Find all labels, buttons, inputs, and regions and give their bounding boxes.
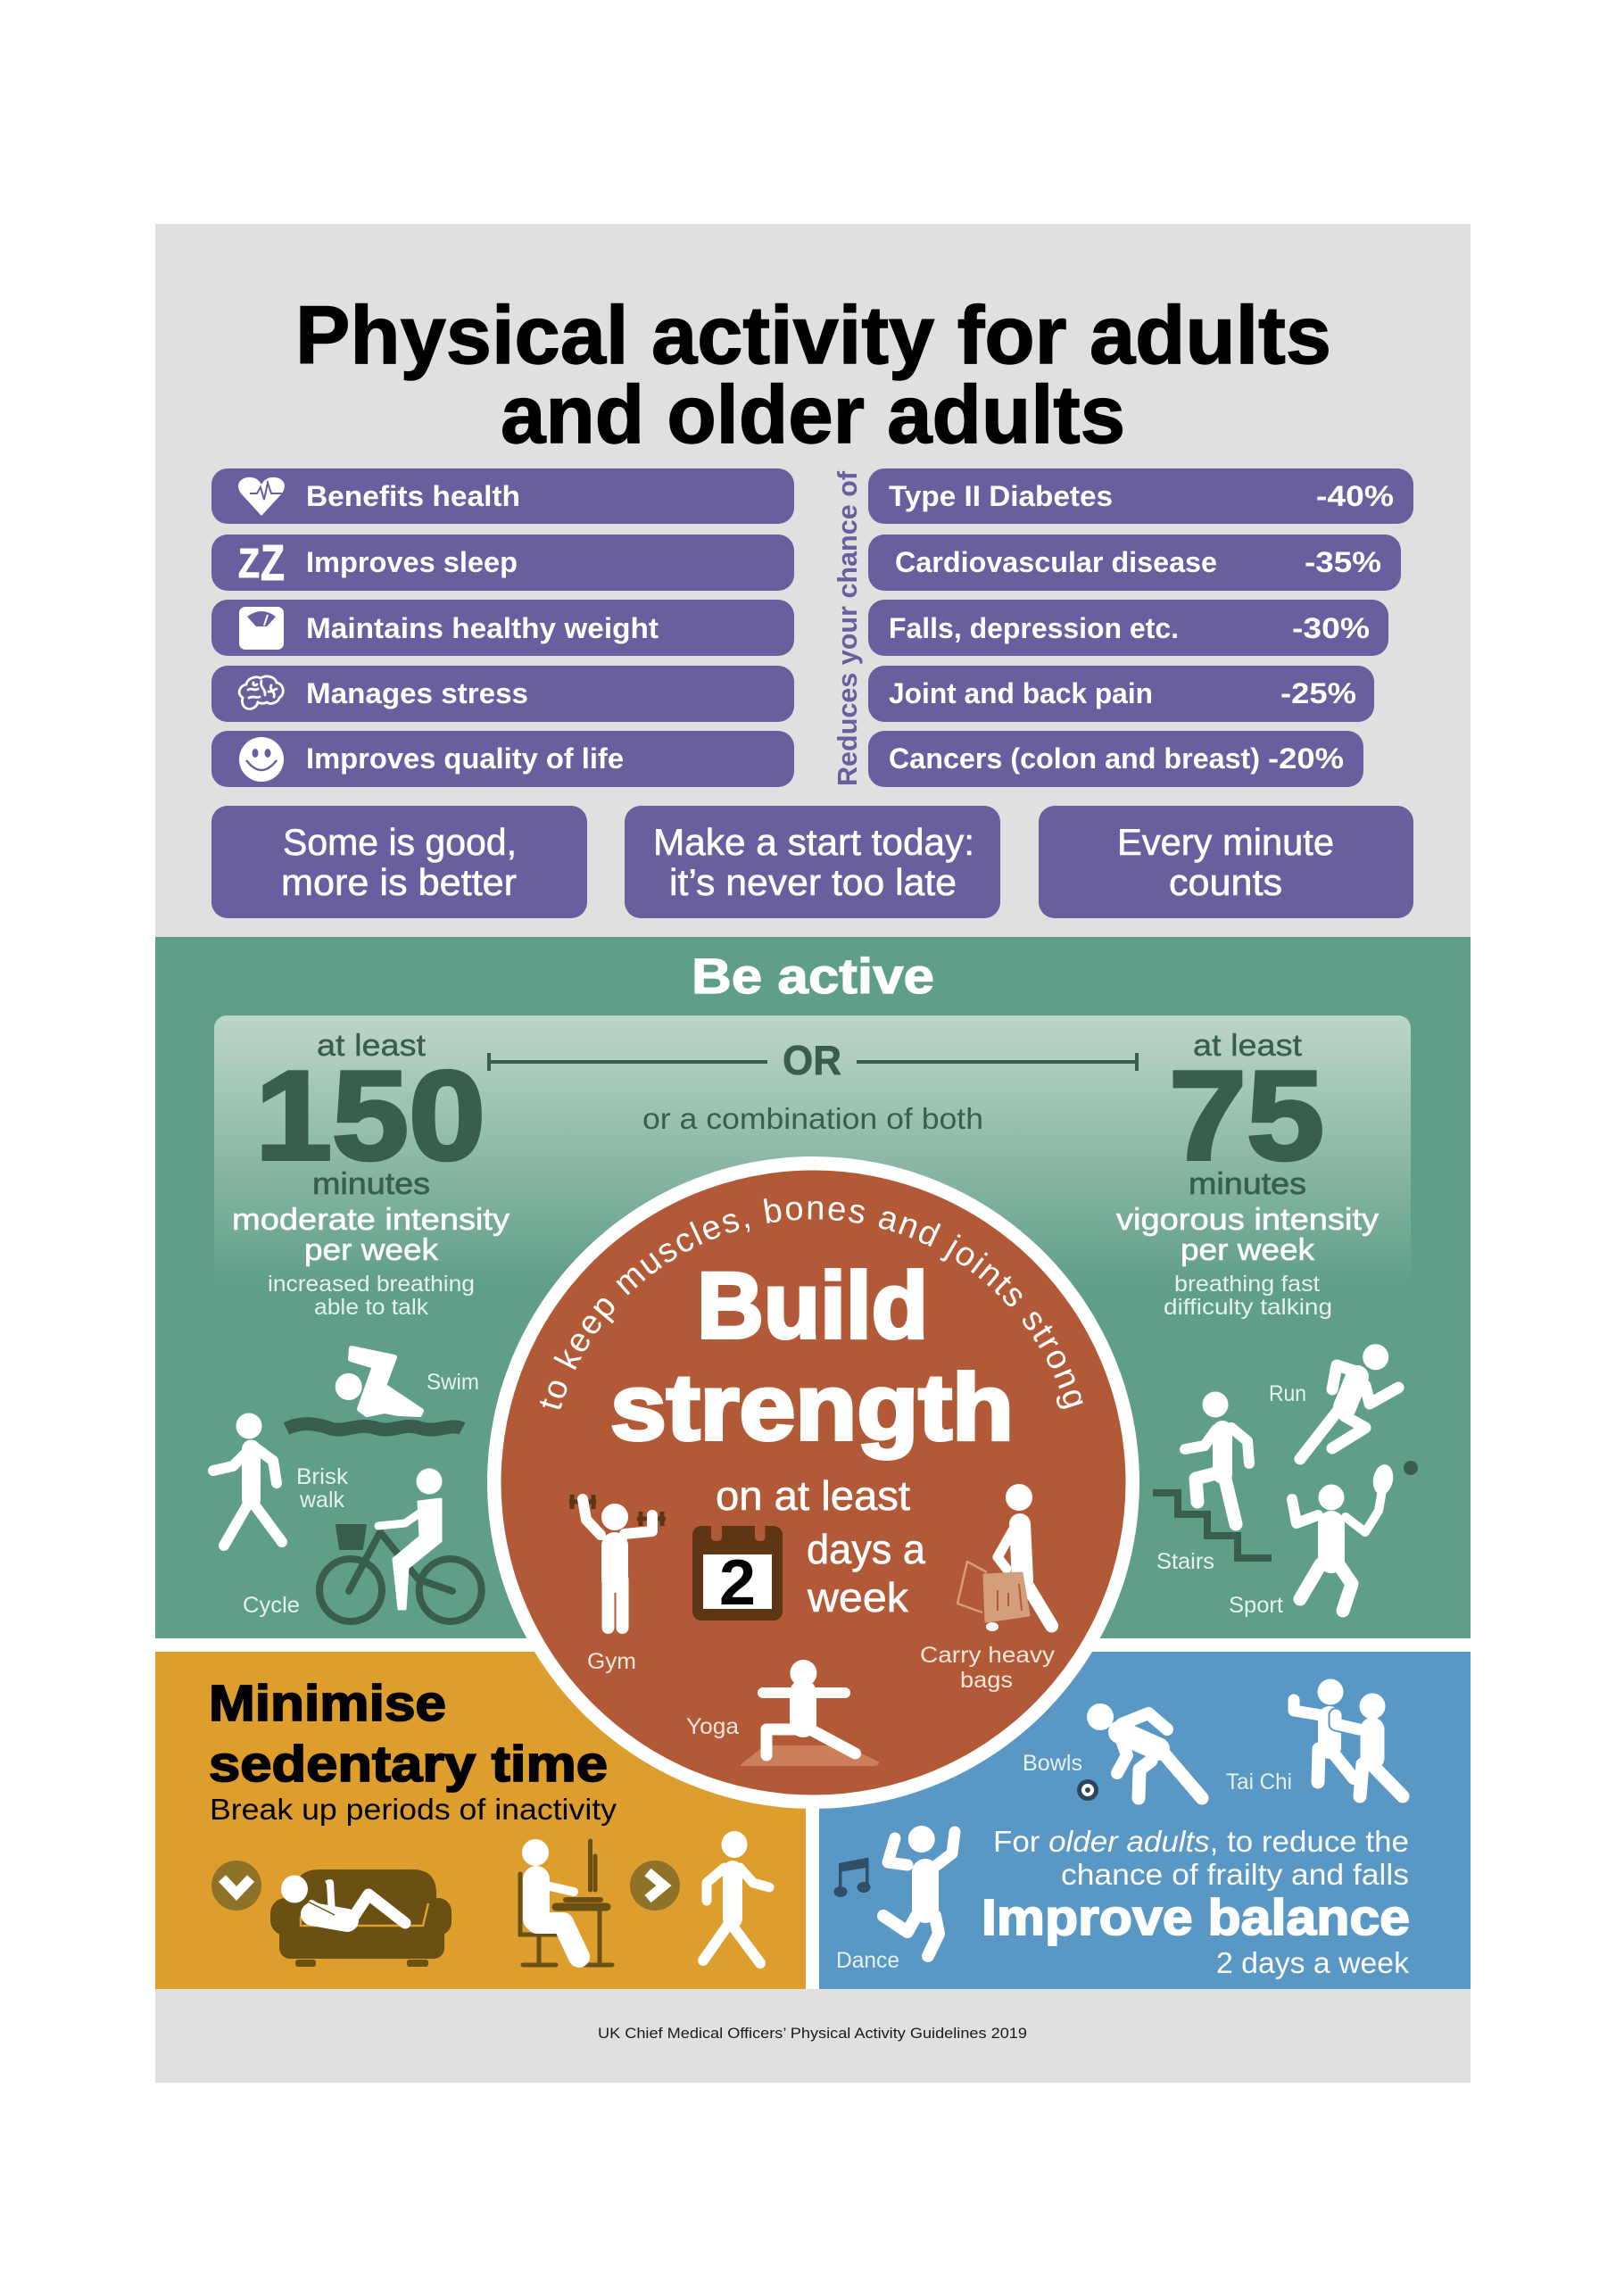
message: some is good xyxy=(211,806,587,918)
column: moderate: per week xyxy=(304,1233,439,1267)
heading: build strength: strength xyxy=(610,1355,1014,1460)
text: minimise sedentary time: Minimise xyxy=(209,1675,446,1732)
text: improve balance xyxy=(982,1825,1410,1979)
text: on at least days a week: on at least xyxy=(716,1472,910,1519)
icon: sleep ZZ: Z xyxy=(238,540,260,586)
text: improve balance: Improve balance xyxy=(982,1889,1410,1946)
heading: build strength xyxy=(610,1254,1014,1460)
heading: build strength: Build xyxy=(697,1254,928,1358)
panel: grey sheet xyxy=(155,224,1471,2083)
risk: cardiovascular disease: Cardiovascular disease xyxy=(895,546,1217,578)
text: improve balance: chance of frailty and falls xyxy=(1061,1858,1409,1891)
benefit: manages stress xyxy=(211,666,794,722)
risk: joint and back pain xyxy=(868,666,1374,722)
column: moderate: at least xyxy=(317,1029,427,1063)
text: improve balance: For older adults , to reduce the xyxy=(993,1825,1409,1858)
number: 75: 75 xyxy=(1169,1045,1324,1187)
risk: cardiovascular disease: -35% xyxy=(1305,546,1381,578)
activity: run: Run xyxy=(1269,1381,1306,1406)
risk: falls, depression: -30% xyxy=(1292,612,1370,644)
icon: down chevron xyxy=(211,1861,261,1911)
curved text: to keep muscles, bones and joints strong: to keep muscles, bones and joints strong xyxy=(539,1198,1083,1409)
risk: joint and back pain: Joint and back pain xyxy=(889,677,1153,709)
panel: risk reductions xyxy=(868,468,1413,787)
message: every minute: Every minute xyxy=(1117,821,1334,863)
message: make a start xyxy=(625,806,1000,918)
activity: bowls xyxy=(1023,1703,1202,1801)
panel: balance xyxy=(819,1652,1471,1989)
activity: bowls: Bowls xyxy=(1023,1751,1082,1776)
column: vigorous: vigorous intensity xyxy=(1116,1203,1379,1237)
activity: swim: Swim xyxy=(427,1370,479,1395)
icon: right chevron xyxy=(630,1861,680,1911)
activity: dance xyxy=(833,1826,955,1973)
panel: be active xyxy=(155,937,1471,1638)
title: and older adults xyxy=(501,369,1125,460)
activity: cycle: Cycle xyxy=(243,1593,300,1618)
panel: aerobic guidance backdrop xyxy=(214,1015,1411,1288)
risk: cardiovascular disease xyxy=(868,535,1401,591)
connector: OR: or a combination of both xyxy=(642,1102,983,1135)
activity: carry heavy bags: Carry heavy xyxy=(920,1643,1056,1668)
column: moderate: able to talk xyxy=(314,1295,429,1320)
benefit: benefits health xyxy=(211,468,794,524)
title xyxy=(295,290,1331,460)
message: some is good: more is better xyxy=(281,861,517,903)
benefit: benefits health: Benefits health xyxy=(306,480,520,512)
risk: joint and back pain: -25% xyxy=(1280,677,1356,709)
activity: swim xyxy=(286,1348,479,1430)
icon: sleep ZZ: Z xyxy=(261,535,285,592)
activity: yoga xyxy=(686,1660,878,1765)
column: vigorous: difficulty talking xyxy=(1164,1295,1332,1320)
activity: gym: Gym xyxy=(587,1649,636,1674)
benefit: improves sleep xyxy=(211,535,794,592)
message: every minute xyxy=(1039,806,1413,918)
activity: yoga: Yoga xyxy=(686,1714,739,1739)
message: make a start: it’s never too late xyxy=(669,861,957,903)
activity: sport: Sport xyxy=(1229,1593,1283,1618)
text: improve balance: 2 days a week xyxy=(1216,1946,1409,1979)
icon: music note xyxy=(833,1858,871,1897)
message: some is good: Some is good, xyxy=(283,821,517,863)
activity: carry heavy bags xyxy=(920,1484,1056,1693)
column: moderate: increased breathing xyxy=(268,1272,475,1297)
activity: stairs xyxy=(1153,1392,1272,1574)
activity: carry heavy bags: bags xyxy=(960,1668,1013,1693)
number: 150: 150 xyxy=(255,1045,485,1187)
icon: smiley xyxy=(239,737,284,782)
column: moderate xyxy=(232,1029,510,1320)
panel: health benefits xyxy=(211,468,794,787)
panel: key messages xyxy=(211,806,1413,918)
text: on at least days a week: week xyxy=(807,1574,909,1620)
connector: OR xyxy=(489,1037,1137,1135)
icon: heart xyxy=(238,477,285,516)
text: on at least days a week xyxy=(716,1472,925,1620)
activity: tai chi xyxy=(1226,1679,1403,1796)
activity: gym xyxy=(569,1495,666,1674)
icon: scales xyxy=(239,607,284,650)
activity: tai chi: Tai Chi xyxy=(1226,1770,1292,1795)
title: Physical activity for adults xyxy=(295,290,1331,381)
text: minimise sedentary time: Break up periods of inactivity xyxy=(210,1793,617,1826)
icon: calendar xyxy=(692,1526,783,1620)
activity: stairs: Stairs xyxy=(1156,1549,1214,1574)
text: on at least days a week: days a xyxy=(807,1526,925,1572)
risk: cancers: Cancers (colon and breast) xyxy=(889,742,1260,775)
footer source: UK Chief Medical Officers’ Physical Activity Guidelines 2019 xyxy=(598,2025,1027,2042)
benefit: healthy weight xyxy=(211,600,794,656)
panel: sedentary xyxy=(155,1652,806,1989)
icon: person at desk xyxy=(520,1839,612,1965)
activity: brisk walk: Brisk xyxy=(296,1464,349,1489)
message: make a start: Make a start today: xyxy=(653,821,974,863)
icon: person walking xyxy=(703,1831,769,1963)
risk: type II diabetes: -40% xyxy=(1316,480,1394,512)
panel: white gutters xyxy=(155,1638,1471,1989)
panel: build strength circle xyxy=(487,1156,1139,1809)
activity: brisk walk: walk xyxy=(299,1488,344,1513)
activity: sport xyxy=(1229,1461,1418,1618)
risk: cancers: -20% xyxy=(1268,742,1344,775)
column: vigorous: per week xyxy=(1181,1233,1315,1267)
column: moderate: moderate intensity xyxy=(232,1203,510,1237)
message: every minute: counts xyxy=(1169,861,1282,903)
benefit: healthy weight: Maintains healthy weight xyxy=(306,612,659,644)
vertical label: reduces your chance of: Reduces your chance of xyxy=(832,470,863,786)
icon: calendar: 2 xyxy=(719,1547,756,1619)
column: vigorous: at least xyxy=(1193,1029,1303,1063)
risk: falls, depression xyxy=(868,600,1388,656)
benefit: improves sleep: Improves sleep xyxy=(306,546,518,578)
column: vigorous: breathing fast xyxy=(1174,1272,1320,1297)
activity: brisk walk xyxy=(213,1413,349,1546)
icon: sleep ZZ xyxy=(238,535,285,592)
benefit: manages stress: Manages stress xyxy=(306,677,528,709)
text: minimise sedentary time xyxy=(209,1675,617,1826)
text: minimise sedentary time: sedentary time xyxy=(209,1736,608,1793)
benefit: quality of life xyxy=(211,731,794,787)
risk: type II diabetes xyxy=(868,468,1413,524)
activity: run xyxy=(1269,1344,1398,1459)
risk: cancers xyxy=(868,731,1363,787)
icon: person on sofa xyxy=(270,1869,452,1967)
risk: type II diabetes: Type II Diabetes xyxy=(889,480,1113,512)
connector: OR: OR xyxy=(783,1037,841,1083)
benefit: quality of life: Improves quality of life xyxy=(306,742,624,775)
column: vigorous xyxy=(1116,1029,1379,1320)
icon: brain xyxy=(239,676,283,709)
activity: cycle xyxy=(243,1469,482,1621)
heading: be active: Be active xyxy=(692,948,934,1004)
column: vigorous: minutes xyxy=(1189,1167,1306,1201)
column: moderate: minutes xyxy=(312,1167,430,1201)
activity: dance: Dance xyxy=(836,1948,899,1973)
risk: falls, depression: Falls, depression etc. xyxy=(889,612,1179,644)
